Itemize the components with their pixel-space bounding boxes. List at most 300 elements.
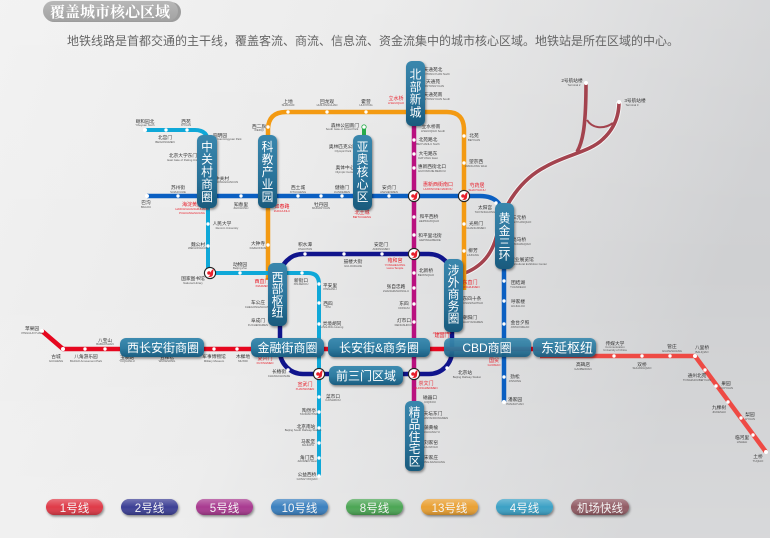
station labels: 八宝山 <box>98 337 112 344</box>
station labels: 北苑路北 <box>419 136 438 143</box>
station labels: 阜成门 <box>251 317 265 324</box>
station labels: Military Museum <box>204 359 225 363</box>
station labels: 西四 <box>323 301 333 307</box>
station labels: 蒲黄榆 <box>424 424 438 431</box>
station labels: 苹果园 <box>25 325 39 332</box>
station labels: 人民大学 <box>213 220 232 227</box>
zone: Olympic core: 核 <box>357 165 369 179</box>
station labels: DATUNLU East <box>418 156 438 160</box>
legend: line 5: 5号线 <box>210 501 240 515</box>
red transfer station labels: FUXINGMEN <box>257 361 273 365</box>
zone: east extension hub: 东延枢纽 <box>541 340 593 356</box>
legend: line 4 <box>496 499 553 515</box>
red transfer station labels: 雍和宫 <box>387 257 403 264</box>
station labels: 森林公园南门 <box>331 122 359 129</box>
station labels: HEPINGLIBEIJIE <box>419 238 441 242</box>
station labels: 农业展览馆 <box>510 256 534 263</box>
station labels: 牡丹园 <box>314 201 328 208</box>
station labels: 上地 <box>283 98 293 104</box>
line 8 green <box>362 126 366 196</box>
station labels: TAORANTING <box>300 412 318 416</box>
station labels: HEPINGXIQIAO <box>419 219 440 223</box>
station labels: PANJIAYUAN <box>506 402 524 406</box>
station labels: SONGJIAZHUANG <box>421 460 445 464</box>
line 4 cyan <box>145 130 319 476</box>
station labels: TONGZHOUBEIYUAN <box>683 378 711 382</box>
station labels: 木樨地 <box>236 353 250 360</box>
red transfer station labels: XUANWUMEN <box>296 387 314 391</box>
station labels: Yiheyuan North <box>135 123 155 127</box>
station labels: Beijing Zoo <box>233 266 247 270</box>
station labels: 磁器口 <box>423 394 437 401</box>
station labels: ZHONGGUANCUN <box>214 180 238 184</box>
red transfer station labels: 复兴门 <box>257 355 273 362</box>
station labels: 劲松 <box>510 373 520 380</box>
zone: west hub <box>268 263 287 326</box>
zone: science and education <box>258 135 277 208</box>
zone: Olympic core: 亚 <box>357 140 369 154</box>
station labels: 团结湖 <box>511 279 525 286</box>
station labels: DENGSHIKOU <box>395 323 413 327</box>
station labels: ZHICHUNLI <box>234 206 249 210</box>
station labels: 国家图书馆 <box>181 275 205 282</box>
station labels: 临河里 <box>735 434 749 441</box>
station labels: 苏州街 <box>171 184 185 191</box>
zone: foreign business: 外 <box>448 276 460 290</box>
station labels: 惠新西街北口 <box>418 163 446 170</box>
station labels: MAJIAPU <box>302 443 314 447</box>
station labels: HUIXINXIJIE BEIKOU <box>418 169 446 173</box>
zone: west hub: 西 <box>272 270 284 284</box>
station labels: East Gate of Peking Univ <box>167 158 199 162</box>
station labels: 天通苑 <box>426 78 440 85</box>
station labels: JIANDEMEN <box>334 190 350 194</box>
station labels: CHANGCHUNJIE <box>268 374 290 378</box>
zone: premium residential: 精 <box>409 406 421 420</box>
station labels: 亮马桥 <box>512 236 526 243</box>
station labels: 东四 <box>399 300 409 306</box>
station labels: JIAOMEN West <box>297 459 317 463</box>
red transfer station labels: Lama Temple <box>387 266 404 270</box>
station labels: 呼家楼 <box>511 298 525 305</box>
zone: science and education: 产 <box>262 165 273 179</box>
station labels: BEIGONGMEN <box>155 140 175 144</box>
station labels: SUZHOUJIE <box>170 190 186 194</box>
station labels: TUANJIEHU <box>510 285 526 289</box>
station labels: HUILONGGUAN <box>317 103 337 107</box>
station labels: 军事博物馆 <box>202 353 226 360</box>
station labels: JINTAIXIZHAO <box>511 325 530 329</box>
zone: west Chang'an <box>120 338 204 357</box>
zone: Financial Street: 金融街商圈 <box>257 340 318 355</box>
station labels: 刘家窑 <box>424 439 438 446</box>
station labels: SHANGDI <box>282 103 295 107</box>
station labels: PINGGUOYUAN <box>22 331 42 335</box>
legend: line 1: 1号线 <box>60 501 90 515</box>
legend: line 13: 13号线 <box>432 501 468 515</box>
station labels: MUXIDI <box>238 359 248 363</box>
station labels: JINSONG <box>509 379 521 383</box>
station labels: 动物园 <box>233 261 247 268</box>
station labels: TAIYANGGONG <box>475 210 495 214</box>
station labels: 车公庄 <box>251 299 265 306</box>
station labels: South Gate of Forest Park <box>326 127 359 131</box>
station labels: Beijing South Railway Station <box>285 428 322 432</box>
station labels: Olympic Park <box>335 149 352 153</box>
station labels: 霍营 <box>361 98 371 105</box>
station labels: PUHUANGYU <box>422 430 440 434</box>
station labels: WUKESONG <box>159 359 175 363</box>
zone: Qiansanmen: 前三门区域 <box>336 368 396 383</box>
zone: premium residential: 区 <box>409 454 421 468</box>
red transfer station labels: 海淀黄庄 <box>182 201 202 208</box>
red transfer station labels: DONGZHIMEN <box>460 285 480 289</box>
station labels: BAJIAO Amusement Park <box>70 359 103 363</box>
station labels: 通州北苑 <box>688 372 707 379</box>
station labels: 2号航站楼 <box>561 77 583 84</box>
station labels: GUCHENG <box>49 359 63 363</box>
station labels: 积水潭 <box>298 241 312 248</box>
station labels: 朝阳门 <box>463 314 477 321</box>
station labels: ANDINGMEN <box>372 247 390 251</box>
zone: science and education: 业 <box>262 178 274 192</box>
station labels: TIANTONGYUAN <box>422 84 444 88</box>
station labels: 安定门 <box>374 241 388 248</box>
zone: Zhongguancun: 商 <box>201 178 213 192</box>
line 13 orange <box>268 112 464 290</box>
station labels: JISHUITAN <box>298 247 312 251</box>
zone: foreign business: 圈 <box>448 312 459 326</box>
red transfer station labels: LISHUIQIAO <box>388 101 405 105</box>
legend: line 2 <box>121 499 178 515</box>
red transfer station labels: SHAOYAOJU <box>468 188 486 192</box>
station labels: XINJIEKOU <box>294 282 308 286</box>
station labels: 潘家园 <box>508 396 522 403</box>
legend: line 4: 4号线 <box>510 501 540 515</box>
station labels: SHUANGQIAO <box>633 366 652 370</box>
station labels: BEIYUAN <box>468 138 480 142</box>
station labels: YUQUANLU <box>119 359 135 363</box>
red transfer station labels: 西直门 <box>254 278 270 285</box>
legend: line 8 <box>346 499 403 515</box>
station labels: 古城 <box>51 353 61 360</box>
zone: Olympic core: 心 <box>357 178 369 192</box>
station labels: XIERQI <box>254 128 264 132</box>
batong line <box>540 356 766 452</box>
station labels: TIANTONGYUAN North <box>420 72 450 76</box>
line 2 navy <box>280 254 452 374</box>
zone: Financial Street <box>251 338 324 357</box>
station nodes <box>40 110 768 478</box>
intro text: 地铁线路是首都交通的主干线，覆盖客流、商流、信息流、资金流集中的城市核心区域。地铁站是所在区域的中心。 <box>67 33 679 48</box>
red transfer station labels: HAIDIANHUANGZHUANG <box>175 207 209 211</box>
zone: science and education: 园 <box>262 190 273 204</box>
station labels: ANZHENMEN <box>380 190 398 194</box>
station labels: 立水桥南 <box>422 123 441 130</box>
station labels: Renmin University <box>216 226 239 230</box>
red transfer station labels: 国贸 <box>489 357 499 364</box>
station labels: 太阳宫 <box>478 204 492 211</box>
red transfer station labels: HUIXINXIJIE NANKOU <box>424 187 452 191</box>
station labels: GAOBEIDIAN <box>574 367 592 371</box>
zone: science and education: 科 <box>262 140 274 154</box>
station labels: SANYUANQIAO <box>511 220 532 224</box>
zone: premium residential: 品 <box>409 418 420 432</box>
station labels: Terminal 3 <box>626 103 639 107</box>
station labels: 巴沟 <box>141 199 151 206</box>
station labels: 西土城 <box>291 184 305 191</box>
station labels: BEIXINQIAO <box>418 273 435 277</box>
line 5 magenta <box>412 62 416 460</box>
zone: east extension hub <box>533 338 596 357</box>
zone: Olympic core <box>353 135 372 210</box>
station labels: GUANGXIMEN <box>466 226 486 230</box>
station labels: 鼓楼大街 <box>344 258 363 265</box>
legend <box>46 499 629 515</box>
station labels: HUJIALOU <box>511 304 525 308</box>
station labels: JIUKESHU <box>712 410 726 414</box>
red transfer station labels <box>175 95 501 391</box>
station labels: 宋家庄 <box>424 454 438 461</box>
station labels: 大钟寺 <box>251 240 265 247</box>
station labels: CHEGONGZHUANG <box>245 305 271 309</box>
zone: foreign business: 务 <box>448 300 460 314</box>
zone: Chang'an & business <box>328 338 430 357</box>
station labels: University of China <box>603 348 627 352</box>
station labels: GUOYUAN <box>719 386 733 390</box>
station labels: 三元桥 <box>512 214 526 221</box>
station labels: BALIQIAO <box>695 350 709 354</box>
station labels: 3号航站楼 <box>624 97 646 104</box>
station labels: CAISHIKOU <box>325 398 341 402</box>
station labels: LINGJING Hutong <box>321 325 344 329</box>
zone: Qiansanmen <box>329 366 403 385</box>
station labels: 北京南站 <box>297 423 316 430</box>
station labels: 北京站 <box>458 369 472 376</box>
zone: west hub: 纽 <box>272 306 284 320</box>
red transfer station labels: 北土城 <box>354 209 370 216</box>
station labels: 五棵松 <box>160 354 174 361</box>
station labels: MUDANYUAN <box>312 206 330 210</box>
zone: golden third ring: 金 <box>499 224 511 238</box>
legend: airport express: 机场快线 <box>577 501 623 515</box>
legend: airport express <box>571 499 629 515</box>
zone: science and education: 教 <box>262 152 274 166</box>
station labels: LISHUIQIAO South <box>421 129 445 133</box>
station labels: 颐和园北 <box>136 118 155 125</box>
station labels: TIANTONGYUAN South <box>420 97 451 101</box>
station labels: 北苑 <box>469 132 479 139</box>
station labels: 安贞门 <box>382 184 396 191</box>
station labels: 灵境胡同 <box>323 320 342 327</box>
station labels: 梨园 <box>745 411 755 418</box>
station labels: 张自忠路 <box>387 283 406 290</box>
station labels: 北新桥 <box>419 267 433 274</box>
legend: line 8: 8号线 <box>360 501 390 515</box>
station labels: 八里桥 <box>695 344 709 351</box>
zone: golden third ring: 三 <box>499 236 511 250</box>
zone: foreign business <box>444 259 463 332</box>
station labels: 平安里 <box>323 282 337 289</box>
station labels: CHAOYANGMEN <box>461 320 483 324</box>
station labels: 天通苑南 <box>424 91 443 98</box>
red transfer station labels: GUOMAO <box>488 363 501 367</box>
red transfer station labels: XIZHIMEN <box>255 284 269 288</box>
station labels: CIQIKOU <box>424 400 436 404</box>
station labels: PINGANLI <box>323 287 337 291</box>
station labels: 西苑 <box>181 118 191 125</box>
zone: premium residential: 宅 <box>409 442 421 456</box>
station labels: 望京西 <box>469 158 483 165</box>
station labels: XITUCHENG <box>290 190 306 194</box>
station labels: WEIGONGCUN <box>188 246 208 250</box>
red transfer station labels: 芍药居 <box>469 182 485 189</box>
red transfer station labels: ZHICHUNLU <box>274 209 290 213</box>
zone: golden third ring <box>495 203 514 269</box>
red transfer station labels: BEITUCHENG <box>353 215 371 219</box>
station labels: 菜市口 <box>326 393 340 400</box>
station labels: 玉泉路 <box>120 354 134 361</box>
station labels: HUOYING <box>359 103 373 107</box>
zone: Zhongguancun: 村 <box>201 165 213 179</box>
station labels: 管庄 <box>667 343 677 350</box>
station labels: 天坛东门 <box>424 410 443 417</box>
station labels: 魏公村 <box>191 241 205 248</box>
red transfer station labels: YONGHEGONG <box>385 263 405 267</box>
station labels: Beijing Railway Station <box>453 375 482 379</box>
station labels: 中关村 <box>215 175 229 182</box>
station labels: LIANGMAQIAO <box>511 242 532 246</box>
zone: north new town: 部 <box>410 80 422 94</box>
zone: foreign business: 涉 <box>448 264 460 278</box>
zone: golden third ring: 环 <box>499 248 511 262</box>
airport express line <box>465 81 621 273</box>
station labels: LIUFANG <box>467 253 479 257</box>
station labels: BABAOSHAN <box>96 342 114 346</box>
station labels: Agricultural Exhibition Center <box>511 262 547 266</box>
red transfer station labels: 惠新西街南口 <box>423 181 453 188</box>
zone: Zhongguancun: 中 <box>201 140 213 154</box>
station labels: ZHANGZIZHONGLU <box>383 289 409 293</box>
station labels: 八角游乐园 <box>74 353 98 360</box>
red transfer station labels: 建国门 <box>434 332 450 339</box>
title <box>43 1 181 22</box>
station labels: 传媒大学 <box>606 340 625 347</box>
station labels: DAZHONGSI <box>250 246 267 250</box>
station labels: Olympic Center <box>335 170 355 174</box>
station labels: LINHELI <box>737 440 748 444</box>
station labels: WANGJING West <box>465 164 487 168</box>
zone: CBD: CBD商圈 <box>462 340 512 355</box>
station labels: 知春里 <box>234 201 248 208</box>
red transfer station labels: JIANGUOMEN <box>433 331 451 335</box>
station labels: FUCHENGMEN <box>248 323 268 327</box>
station labels: 柳芳 <box>468 247 478 254</box>
red transfer station labels: 知春路 <box>274 203 290 210</box>
line 1 red <box>42 331 545 349</box>
station labels: 公益西桥 <box>298 471 317 478</box>
station labels: 高碑店 <box>576 361 590 368</box>
zone: north new town: 城 <box>410 106 422 120</box>
station labels: 灯市口 <box>397 317 411 324</box>
station labels: 西二旗 <box>252 123 266 130</box>
station labels: 东四十条 <box>463 295 482 302</box>
station labels: 回龙观 <box>320 98 334 105</box>
station labels: GULOUDAJIE <box>344 264 362 268</box>
station labels: BEIYUANLU North <box>416 142 440 146</box>
zone: premium residential: 住 <box>409 430 421 444</box>
station labels: GUANZHUANG <box>662 349 682 353</box>
station labels: 新街口 <box>294 277 308 284</box>
station labels: 果园 <box>721 381 731 387</box>
legend: line 5 <box>196 499 253 515</box>
station labels: XISI <box>325 305 331 309</box>
legend: line 2: 2号线 <box>135 501 165 515</box>
legend: line 10 <box>271 499 328 515</box>
line 10 blue <box>147 196 504 402</box>
station labels: 圆明园 <box>213 133 227 139</box>
station labels: XIYUAN <box>181 123 191 127</box>
red transfer station labels: CHONGWENMEN <box>414 386 438 390</box>
zone: Zhongguancun: 关 <box>201 152 213 166</box>
station labels: LIUJIAYAO <box>424 445 439 449</box>
station labels: GONGYIXIQIAO <box>297 477 318 481</box>
zone: Olympic core: 奥 <box>357 152 369 166</box>
station labels: National Library <box>183 281 203 285</box>
zone: north new town <box>406 61 425 126</box>
station labels: 角门西 <box>300 454 314 461</box>
station labels: 金台夕照 <box>511 319 530 326</box>
station labels: BAGOU <box>141 205 151 209</box>
station labels: Terminal 2 <box>568 83 581 87</box>
zone: west Chang'an: 西长安街商圈 <box>127 340 199 355</box>
station labels: 北宫门 <box>158 134 172 141</box>
legend: line 13 <box>421 499 478 515</box>
zone: premium residential <box>405 401 424 471</box>
station labels: 马家堡 <box>301 438 315 445</box>
station labels: 双桥 <box>637 361 647 368</box>
station labels: 北京大学东门 <box>169 152 197 159</box>
interchange markers <box>204 190 470 380</box>
station labels: DONGSISHITIAO <box>461 301 484 305</box>
station labels: 大屯路东 <box>419 150 438 157</box>
station labels: DONGSI <box>398 306 410 310</box>
zone: north new town: 新 <box>410 92 422 106</box>
station labels: TUQIAO <box>753 459 764 463</box>
red transfer station labels: 立水桥 <box>388 95 404 102</box>
red transfer station labels: 宣武门 <box>297 381 313 388</box>
station labels: 和平里北街 <box>418 232 442 239</box>
zone: north new town: 北 <box>410 68 422 82</box>
zone: golden third ring: 黄 <box>499 212 511 226</box>
red transfer station labels: PUHUANGZHUANG <box>179 211 205 215</box>
legend: line 10: 10号线 <box>282 501 318 515</box>
station labels: 土桥 <box>753 453 763 460</box>
station labels: 长椿街 <box>272 368 286 375</box>
zone: west hub: 部 <box>272 282 284 296</box>
station labels: 奥林匹克公园 <box>329 143 357 150</box>
zone: foreign business: 商 <box>448 288 460 302</box>
station labels: 奥体中心 <box>336 164 355 171</box>
zone: Zhongguancun <box>197 135 217 208</box>
zone: Olympic core: 区 <box>357 190 369 204</box>
station labels: 九棵树 <box>712 404 726 411</box>
red transfer station labels: 东直门 <box>462 279 478 286</box>
red transfer station labels: 崇文门 <box>418 380 434 387</box>
station labels <box>22 66 764 481</box>
metro map <box>22 61 768 481</box>
station labels: 陶然亭 <box>302 407 316 414</box>
